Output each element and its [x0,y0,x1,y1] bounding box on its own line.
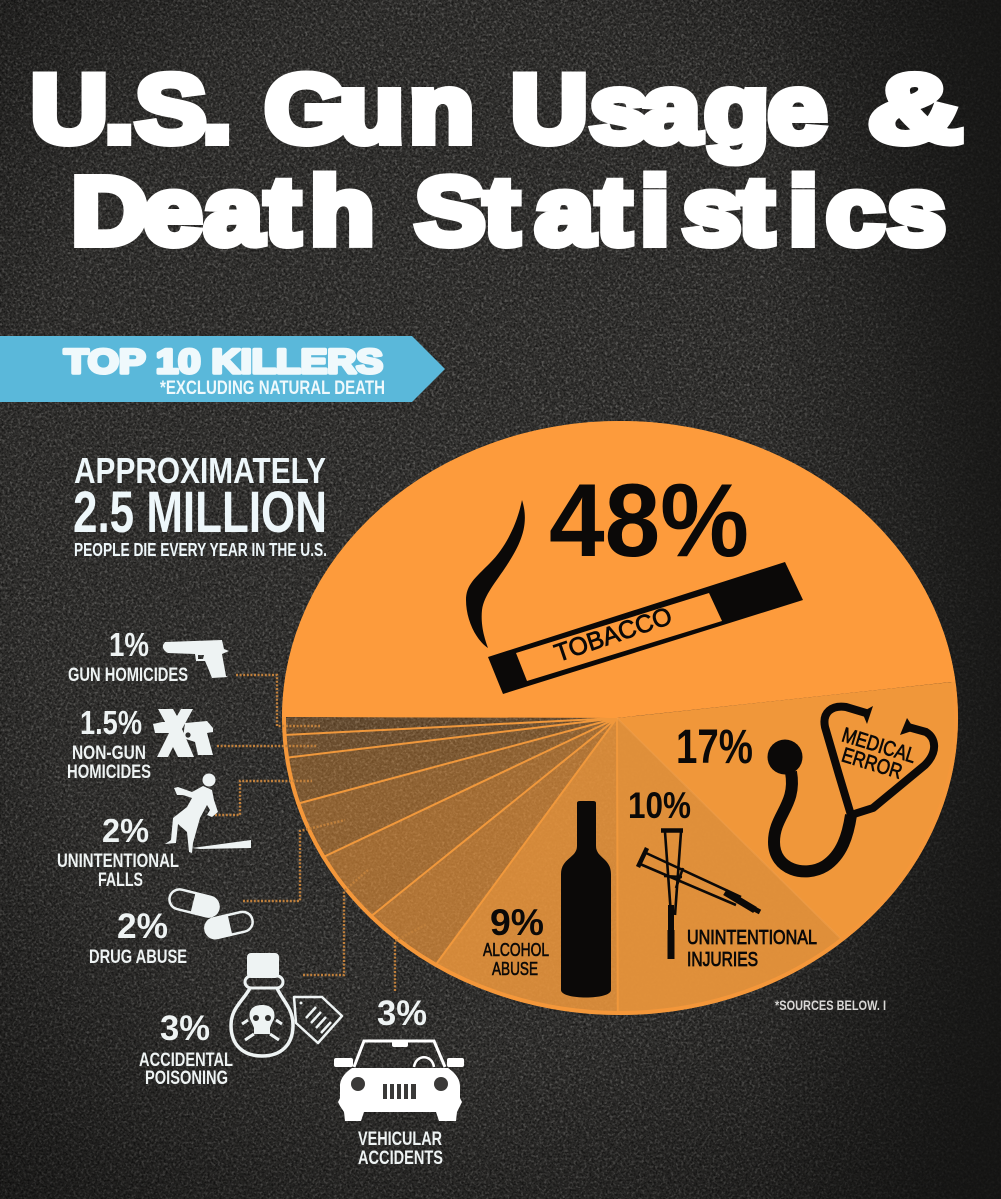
icon: bottle [561,801,611,998]
injuries label line 2: INJURIES [687,949,758,971]
title [31,54,963,265]
icon: pills [167,886,255,941]
percent: 2% [117,907,168,946]
percent: 2% [102,812,149,849]
icon: falling person [165,774,251,853]
item: unintentional falls 2% [57,774,251,891]
intro text: 2.5 million: PEOPLE DIE EVERY YEAR IN THE U.S. [74,539,327,560]
percent: 1% [109,626,149,663]
injuries label line 1: UNINTENTIONAL [687,927,817,949]
intro text: 2.5 million: 2.5 MILLION [73,480,327,545]
title: Death [72,158,374,265]
icon: smoke [466,500,525,648]
medical percent: 17% [676,721,753,774]
title: & [868,55,963,163]
icon: crossed out pistol [153,709,213,757]
label line 2: HOMICIDES [67,762,151,783]
title: Statistics [415,158,946,265]
item: vehicular accidents 3% [334,994,464,1169]
injuries percent: 10% [628,785,691,826]
segment: alcohol abuse 9% [483,801,611,998]
alcohol label line 1: ALCOHOL [483,940,549,960]
intro text: 2.5 million: APPROXIMATELY [74,450,326,491]
sources note: *SOURCES BELOW. I [775,998,886,1013]
banner: top 10 killers [0,336,445,402]
icon: car [334,1041,464,1121]
segment: medical error 17% [676,706,934,871]
label line 2: POISONING [145,1068,228,1089]
item: gun homicides 1% [68,626,229,686]
item: non-gun homicides 1.5% [67,704,213,783]
icon: pistol [163,640,229,678]
icon: poison bottle [231,953,342,1056]
title: Usage [511,54,827,163]
segment: tobacco 48% [466,463,803,694]
icon: cigarette [488,562,803,694]
alcohol percent: 9% [490,902,544,943]
segment: unintentional injuries 10% [628,785,817,971]
medical label: MEDICAL [839,724,919,768]
title: U.S. [31,54,232,163]
percent: 3% [160,1009,210,1048]
icon: stethoscope [768,706,934,871]
label line 2: ACCIDENTS [358,1148,443,1169]
alcohol label line 2: ABUSE [492,959,538,979]
label line 1: NON-GUN [72,743,146,764]
label line 1: UNINTENTIONAL [57,851,179,872]
label line 2: FALLS [98,870,143,891]
intro text: 2.5 million [73,450,327,560]
percent: 3% [377,994,427,1033]
label line 1: ACCIDENTAL [139,1050,233,1071]
item: accidental poisoning 3% [139,953,342,1089]
label: GUN HOMICIDES [68,665,188,686]
label: DRUG ABUSE [89,947,187,968]
banner heading: TOP 10 KILLERS [64,343,383,381]
item: drug abuse 2% [89,886,255,968]
pie chart [282,421,958,1015]
title: Gun [265,54,474,163]
label line 1: VEHICULAR [358,1129,442,1150]
percent: 1.5% [80,704,142,741]
tobacco label: TOBACCO [551,602,675,668]
tobacco percent: 48% [549,463,749,579]
banner subheading: *EXCLUDING NATURAL DEATH [160,378,385,399]
icon: crutches [638,830,760,959]
leader lines [215,675,427,991]
error label: ERROR [839,744,905,784]
